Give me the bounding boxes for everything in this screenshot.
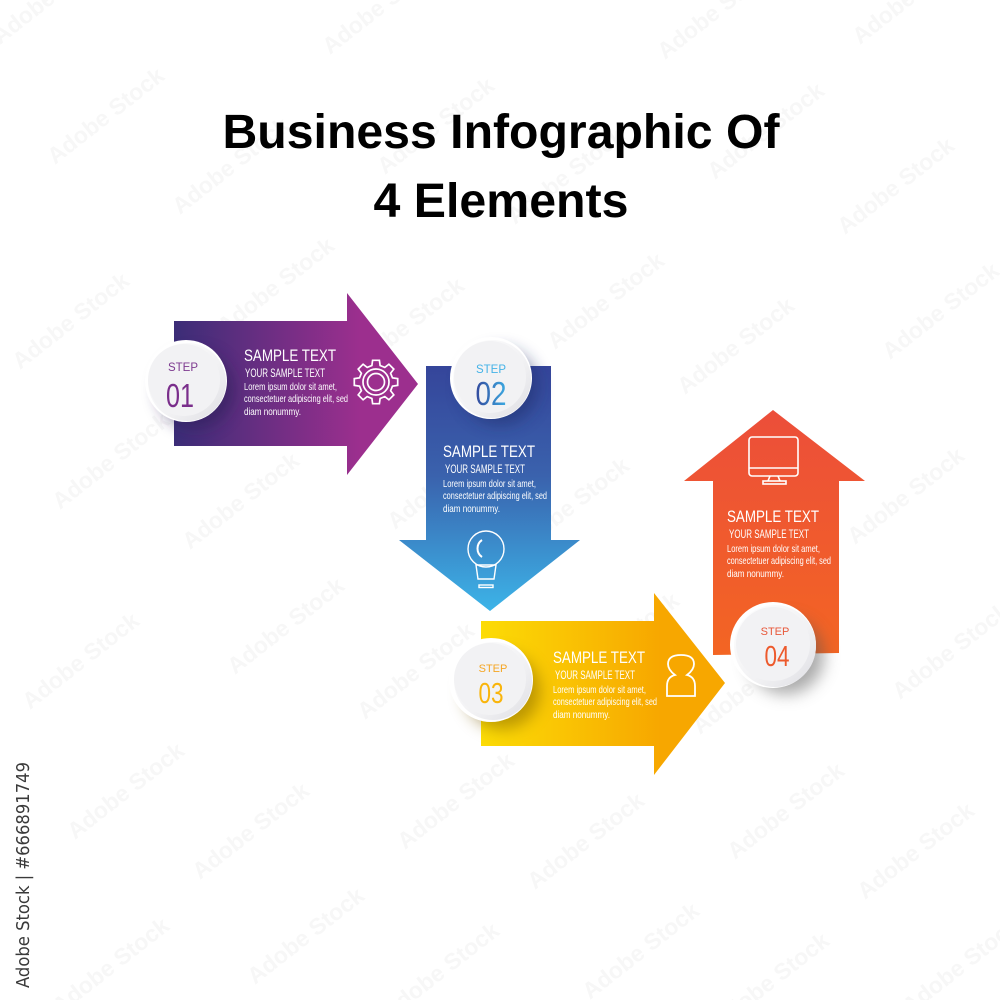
- arrow body blue: [399, 366, 580, 611]
- step 3 text block: consectetuer adipiscing elit, sed: [553, 696, 657, 708]
- watermark pattern: Adobe Stock: [42, 62, 169, 169]
- step 1 text block: consectetuer adipiscing elit, sed: [244, 393, 348, 405]
- step 4 badge: 04: [764, 641, 790, 673]
- arrow body orange: [684, 410, 865, 655]
- watermark pattern: Adobe Stock: [502, 122, 629, 229]
- watermark pattern: Adobe Stock: [722, 757, 849, 864]
- watermark pattern: Adobe Stock: [177, 447, 304, 554]
- step 4 text block: [727, 508, 831, 580]
- step 4 badge: [730, 602, 824, 694]
- watermark pattern: Adobe Stock: [382, 427, 509, 534]
- watermark pattern: Adobe Stock: [557, 587, 684, 694]
- watermark pattern: Adobe Stock: [212, 232, 339, 339]
- icon: person: [667, 655, 695, 696]
- stock credit vertical text: Adobe Stock | #666891749: [13, 762, 34, 988]
- watermark pattern: Adobe Stock: [687, 632, 814, 739]
- step 3 text block: diam nonummy.: [553, 709, 610, 721]
- arrow body purple: [174, 293, 418, 475]
- step 1 badge: [145, 340, 234, 428]
- watermark pattern: Adobe Stock: [702, 77, 829, 184]
- step 1 badge: 01: [166, 377, 194, 414]
- step 3 text block: YOUR SAMPLE TEXT: [555, 668, 635, 682]
- panel: step 4 arrow: [684, 410, 865, 694]
- watermark pattern: Adobe Stock: [852, 797, 979, 904]
- step 2 text block: YOUR SAMPLE TEXT: [445, 462, 525, 476]
- step 3 text block: [553, 649, 657, 721]
- step 2 text block: consectetuer adipiscing elit, sed: [443, 490, 547, 502]
- title: [222, 106, 781, 228]
- step 2 text block: Lorem ipsum dolor sit amet,: [443, 478, 536, 490]
- icon: gear: [354, 360, 398, 404]
- step 4 text block: consectetuer adipiscing elit, sed: [727, 555, 831, 567]
- icon: monitor: [749, 437, 798, 484]
- step 4 text block: Lorem ipsum dolor sit amet,: [727, 543, 820, 555]
- step 1 badge: STEP: [168, 362, 198, 374]
- title: Business Infographic Of: [222, 106, 781, 159]
- step 3 badge: [449, 638, 540, 729]
- step 2 badge: STEP: [476, 364, 506, 376]
- watermark pattern: Adobe Stock: [17, 607, 144, 714]
- step 2 text block: [443, 443, 547, 515]
- watermark pattern: Adobe Stock: [167, 112, 294, 219]
- watermark pattern: Adobe Stock: [712, 457, 839, 564]
- step 1 text block: diam nonummy.: [244, 406, 301, 418]
- watermark pattern: Adobe Stock: [47, 407, 174, 514]
- step 1 text block: YOUR SAMPLE TEXT: [245, 366, 325, 380]
- watermark pattern: Adobe Stock: [832, 132, 959, 239]
- arrow body yellow: [481, 593, 725, 775]
- watermark pattern: Adobe Stock: [242, 882, 369, 989]
- step 3 badge: STEP: [479, 663, 507, 675]
- watermark pattern: Adobe Stock: [187, 777, 314, 884]
- watermark pattern: Adobe Stock: [542, 247, 669, 354]
- step 1 text block: [244, 347, 348, 418]
- watermark pattern: Adobe Stock: [842, 442, 969, 549]
- watermark pattern: Adobe Stock: [62, 737, 189, 844]
- step 2 text block: SAMPLE TEXT: [443, 443, 535, 461]
- watermark pattern: Adobe Stock: [342, 272, 469, 379]
- title: 4 Elements: [374, 175, 628, 228]
- step 1 text block: Lorem ipsum dolor sit amet,: [244, 381, 337, 393]
- step 4 text block: YOUR SAMPLE TEXT: [729, 527, 809, 541]
- watermark pattern: Adobe Stock: [222, 572, 349, 679]
- watermark pattern: Adobe Stock: [7, 267, 134, 374]
- panel: step 3 arrow: [449, 593, 725, 775]
- step 2 badge: [450, 337, 538, 425]
- watermark pattern: Adobe Stock: [522, 787, 649, 894]
- panel: step 1 arrow: [145, 293, 418, 475]
- step 2 badge: 02: [476, 375, 506, 412]
- step 3 text block: SAMPLE TEXT: [553, 649, 645, 667]
- watermark pattern: Adobe Stock: [672, 292, 799, 399]
- watermark pattern: Adobe Stock: [392, 747, 519, 854]
- step 4 text block: diam nonummy.: [727, 568, 784, 580]
- step 1 text block: SAMPLE TEXT: [244, 347, 336, 365]
- watermark pattern: Adobe Stock: [372, 72, 499, 179]
- panel: step 2 arrow: [399, 337, 580, 611]
- step 3 text block: Lorem ipsum dolor sit amet,: [553, 684, 646, 696]
- watermark pattern: Adobe Stock: [507, 452, 634, 559]
- step 3 badge: 03: [478, 678, 504, 710]
- icon: light bulb: [468, 531, 504, 588]
- step 4 text block: SAMPLE TEXT: [727, 508, 819, 526]
- step 2 text block: diam nonummy.: [443, 503, 500, 515]
- watermark pattern: Adobe Stock: [352, 617, 479, 724]
- step 4 badge: STEP: [761, 626, 789, 638]
